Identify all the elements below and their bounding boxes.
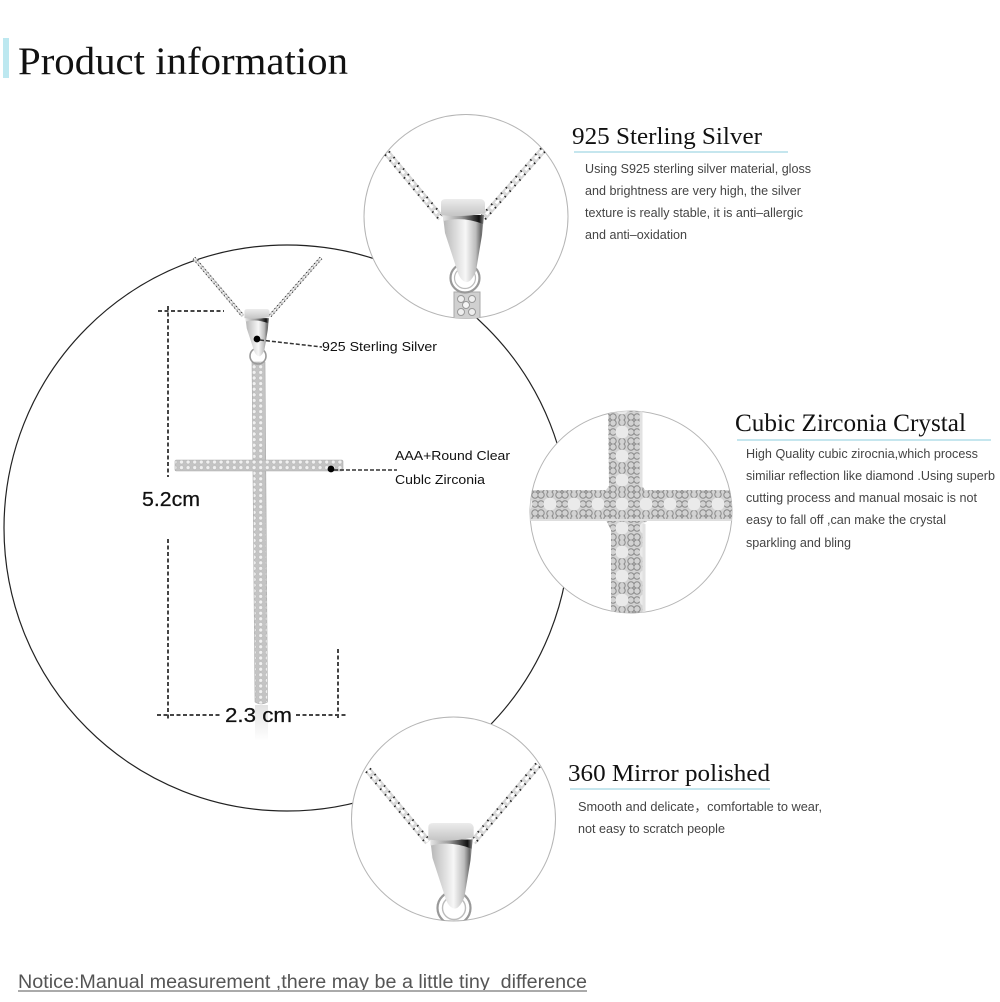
feature: 360 Mirror polished [568,761,822,836]
small circle 2 closeup: cross [528,405,735,620]
width dimension 2.3 cm: 2.3 cm [225,705,292,727]
feature: 360 Mirror polished: Smooth and delicate，comfortable to wear, [578,800,822,814]
small circle 2 white fill and outline [530,411,732,613]
feature: 925 Sterling Silver [572,124,811,242]
feature: 360 Mirror polished: 360 Mirror polished [568,761,770,787]
reflection under cross [255,705,268,741]
large circle outline [4,245,570,811]
callout: AAA+Round Clear Cubic Zirconia: AAA+Round Clear [395,448,511,463]
feature: Cubic Zirconia Crystal: High Quality cubic zirocnia,which process [746,447,978,461]
feature: 925 Sterling Silver: texture is really stable, it is anti–allergic [585,206,803,220]
height dimension 5.2cm: 5.2cm [142,489,200,511]
small circle 1 white fill and outline [364,114,568,318]
cross with zirconia [175,362,343,704]
footer notice: Notice:Manual measurement ,there may be a little tiny difference [18,972,587,993]
feature: Cubic Zirconia Crystal: Cubic Zirconia Crystal [735,410,966,437]
feature: Cubic Zirconia Crystal: easy to fall off ,can make the crystal [746,513,946,527]
feature: 925 Sterling Silver: and brightness are very high, the silver [585,184,801,198]
feature: Cubic Zirconia Crystal: similiar reflection like diamond .Using superb [746,469,995,483]
ring [250,348,266,364]
callout: 925 Sterling Silver [254,336,438,354]
title: Product information [18,40,348,83]
main necklace illustration [175,258,343,741]
pendant bail [244,309,270,356]
feature: Cubic Zirconia Crystal: sparkling and bling [746,536,851,550]
callout: AAA+Round Clear Cubic Zirconia: Cublc Zirconia [395,472,486,487]
feature: 925 Sterling Silver: and anti–oxidation [585,228,687,242]
chain right [270,258,321,316]
small circle 3 closeup: polished bail [368,765,538,924]
title accent bar [3,38,9,78]
feature: 925 Sterling Silver: Using S925 sterling silver material, gloss [585,162,811,176]
small circle 3 white fill and outline [352,717,556,921]
feature: 925 Sterling Silver: 925 Sterling Silver [572,124,762,150]
chain left [194,258,243,316]
callout: 925 Sterling Silver: 925 Sterling Silver [322,339,438,354]
feature: Cubic Zirconia Crystal [735,410,995,550]
feature: Cubic Zirconia Crystal: cutting process and manual mosaic is not [746,491,978,505]
callout: AAA+Round Clear Cubic Zirconia [328,448,511,487]
feature: 360 Mirror polished: not easy to scratch people [578,822,725,836]
small circle 1 closeup: bail [387,150,543,322]
